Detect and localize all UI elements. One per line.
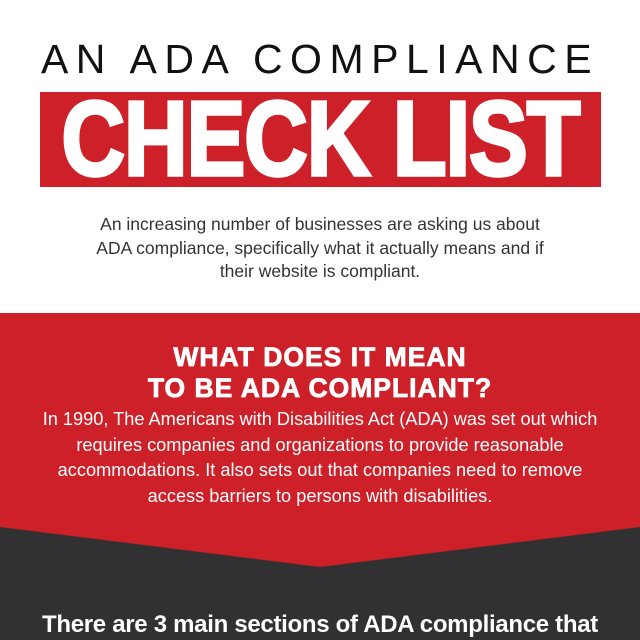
- section heading: [148, 342, 492, 403]
- title: AN ADA COMPLIANCE: [41, 36, 599, 82]
- section heading: TO BE ADA COMPLIANT?: [148, 373, 492, 403]
- dark background with red chevron: [0, 313, 640, 640]
- red title box: [40, 92, 601, 187]
- intro text: An increasing number of businesses are asking us about ADA compliance, specifically what it actually means and if their website is compliant.: [96, 214, 544, 281]
- dark section heading: There are 3 main sections of ADA compliance that: [42, 611, 598, 638]
- panel: what does it mean: [43, 342, 597, 506]
- section body text: In 1990, The Americans with Disabilities Act (ADA) was set out which requires companies and organizations to provide reasonable accommodations. It also sets out that companies need to remove access barriers to persons with disabilities.: [43, 409, 597, 506]
- section heading: WHAT DOES IT MEAN: [173, 342, 467, 372]
